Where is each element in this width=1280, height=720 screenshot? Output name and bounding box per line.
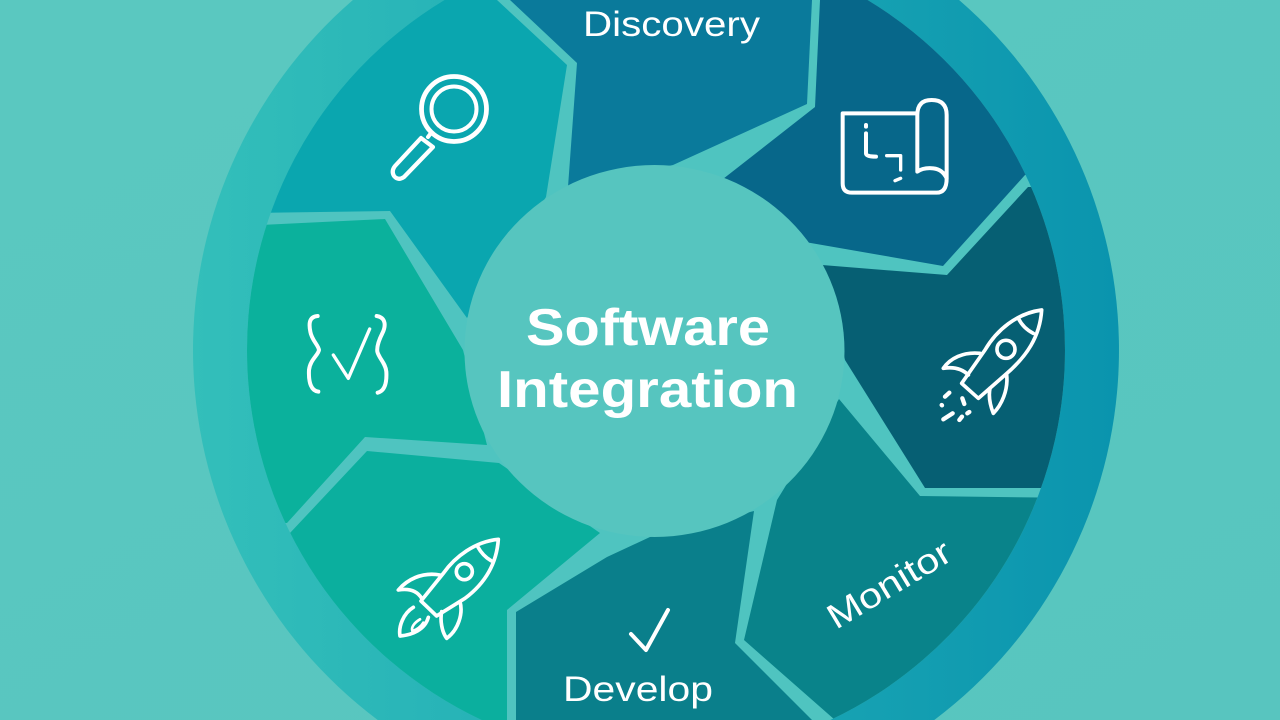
title: Software xyxy=(526,299,770,357)
center circle xyxy=(464,165,844,537)
icon: blueprint xyxy=(843,100,947,193)
icon: code check xyxy=(309,316,386,393)
segment: code check xyxy=(240,219,487,523)
segment: search xyxy=(250,0,567,318)
cycle segments xyxy=(240,0,1080,720)
segment: develop xyxy=(516,511,812,720)
icon: magnifier xyxy=(393,76,486,179)
label: develop: Develop xyxy=(563,670,713,709)
segment: monitor xyxy=(744,399,1038,718)
icon: deploy rocket xyxy=(942,310,1042,420)
outer ring xyxy=(193,0,1119,720)
segment: discovery xyxy=(510,0,812,187)
infographic: software integration cycle xyxy=(193,0,1119,720)
segment: blueprint xyxy=(724,0,1026,266)
icon: launch rocket xyxy=(398,539,498,638)
inner disc gaps xyxy=(247,0,1065,720)
icon: check mark xyxy=(631,610,668,650)
label: discovery: Discovery xyxy=(583,5,761,44)
title xyxy=(497,299,798,419)
title: Integration xyxy=(497,361,798,419)
segment: deploy rocket xyxy=(822,187,1080,488)
label: monitor: Monitor xyxy=(820,532,959,637)
segment: launch rocket xyxy=(290,451,600,720)
